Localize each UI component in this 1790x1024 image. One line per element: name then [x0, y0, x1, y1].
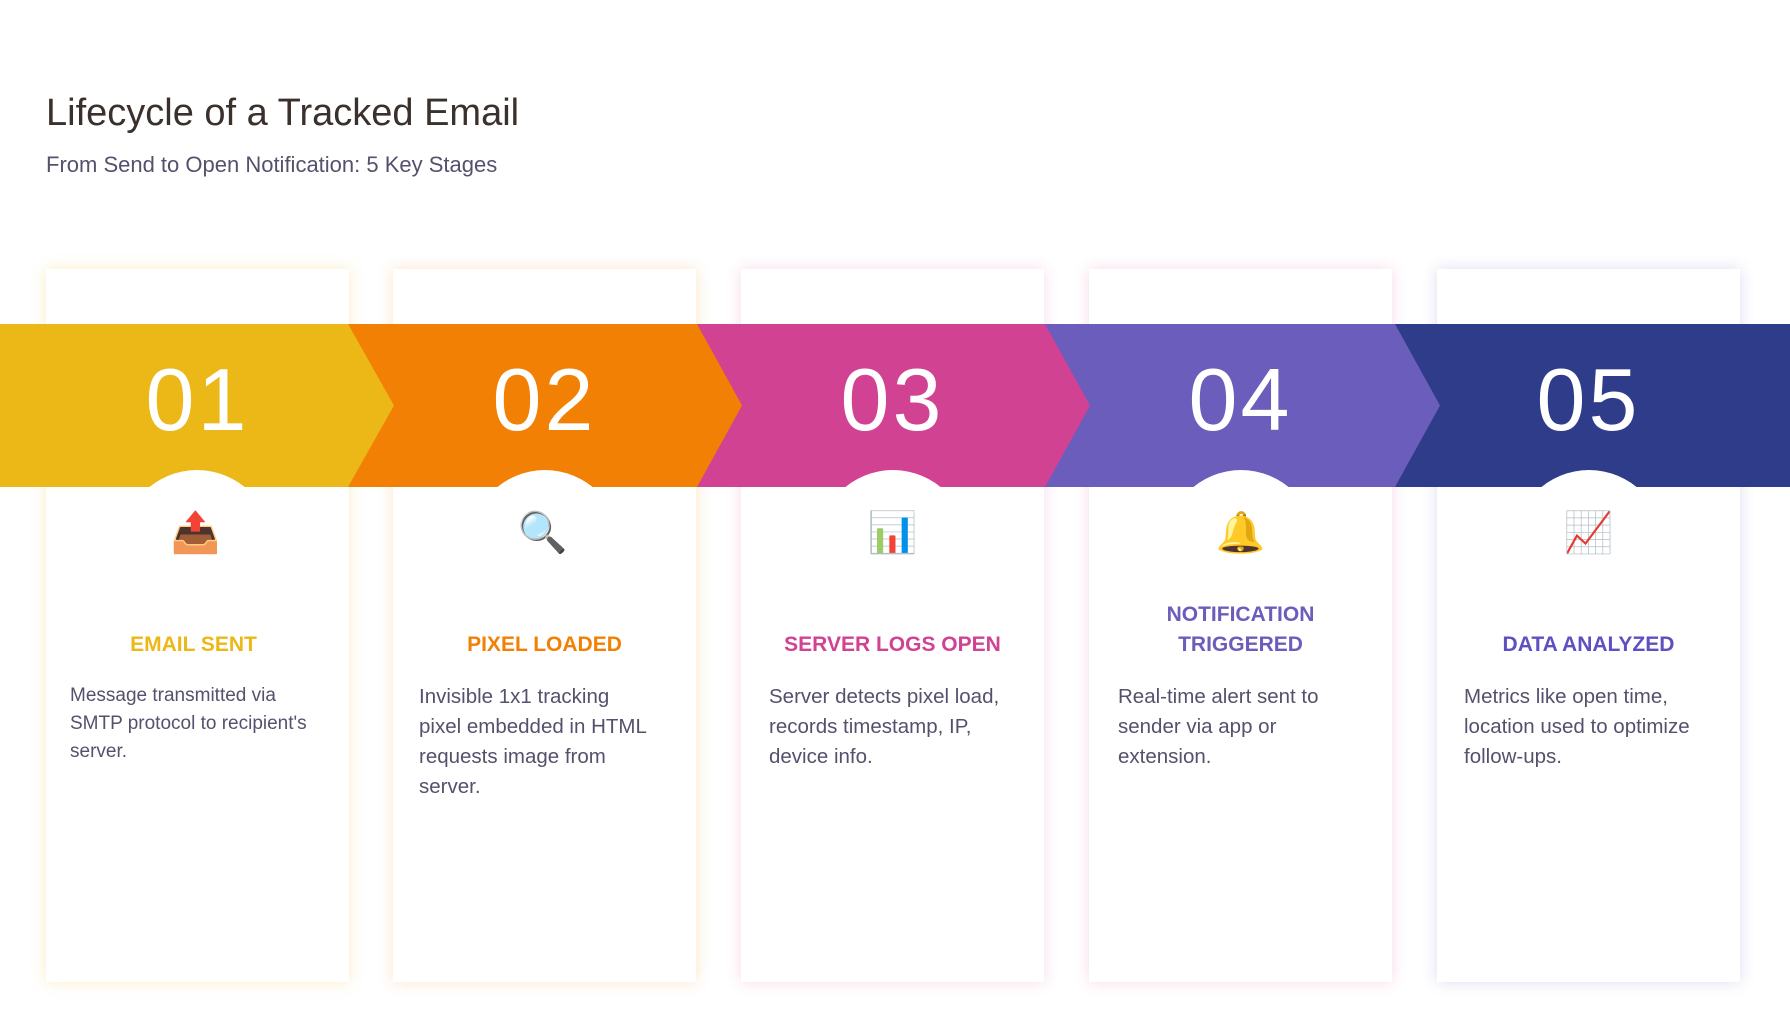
icon: bar chart: 📊 — [868, 509, 917, 556]
heading 2: PIXEL LOADED — [467, 633, 622, 656]
number 05: 05 — [1537, 350, 1640, 449]
number 04: 04 — [1189, 350, 1292, 449]
card 2 — [393, 269, 696, 982]
card 4 — [1089, 269, 1392, 982]
card 3 — [741, 269, 1044, 982]
chevron band — [0, 324, 1790, 487]
heading 4: TRIGGERED — [1178, 633, 1303, 656]
desc 2: Invisible 1x1 tracking pixel embedded in HTML requests image from server. — [419, 685, 646, 798]
desc 4: Real-time alert sent to sender via app or extension. — [1118, 685, 1319, 768]
desc 5: Metrics like open time, location used to optimize follow-ups. — [1464, 685, 1690, 768]
heading 3: SERVER LOGS OPEN — [784, 633, 1001, 656]
heading 4 — [1167, 603, 1314, 656]
number 02: 02 — [493, 350, 596, 449]
icon: outbox: 📤 — [171, 509, 220, 556]
desc 3: Server detects pixel load, records timestamp, IP, device info. — [769, 685, 999, 768]
heading 5: DATA ANALYZED — [1503, 633, 1674, 656]
title: Lifecycle of a Tracked Email — [46, 92, 519, 134]
number 03: 03 — [841, 350, 944, 449]
card 1 — [46, 269, 349, 982]
subtitle: From Send to Open Notification: 5 Key Stages — [46, 152, 497, 177]
number 01: 01 — [146, 350, 249, 449]
icon: chart up: 📈 — [1564, 509, 1613, 556]
white bumps — [122, 470, 272, 620]
desc 1: Message transmitted via SMTP protocol to recipient's server. — [70, 685, 307, 762]
heading 4: NOTIFICATION — [1167, 603, 1314, 626]
icon: magnifier: 🔍 — [518, 509, 567, 556]
icon: bell: 🔔 — [1216, 509, 1265, 556]
heading 1: EMAIL SENT — [130, 633, 257, 656]
card 5 — [1437, 269, 1740, 982]
